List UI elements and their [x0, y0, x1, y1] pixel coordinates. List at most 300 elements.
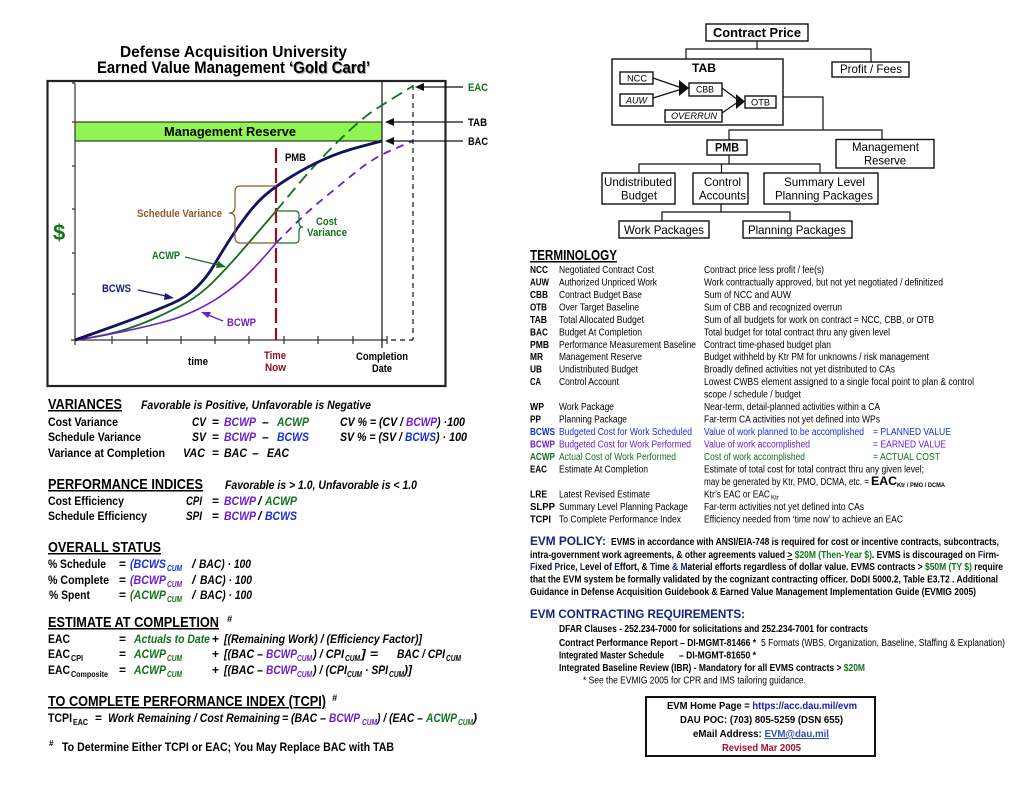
row: schedule variance: SV	[192, 430, 207, 444]
row: cost variance: –	[262, 415, 269, 429]
row: percent schedule: CUM	[167, 564, 182, 573]
row: EAC composite: )]	[402, 663, 413, 677]
term: EAC: Ktr / PMO / DCMA	[897, 482, 945, 489]
term: WP	[530, 402, 880, 413]
requirement note: * See the EVMIG 2005 for CPR and IMS tailoring guidance.	[583, 676, 806, 686]
footnote: To Determine Either TCPI or EAC; You May Replace BAC with TAB	[62, 740, 394, 754]
row: schedule variance: –	[262, 430, 269, 444]
heading: estimate at completion: ESTIMATE AT COMPLETION	[48, 614, 219, 631]
row: cost variance: Cost Variance	[48, 415, 118, 429]
term: LRE	[530, 490, 780, 502]
term: WP: WP	[530, 402, 544, 413]
box: NCC: NCC	[627, 74, 647, 84]
row: EAC: +	[212, 632, 219, 646]
row: TCPI formula: CUM	[458, 718, 473, 727]
term: NCC: NCC	[530, 265, 548, 276]
row: variance at completion: BAC	[224, 446, 247, 460]
row: TCPI formula: BCWP	[329, 711, 361, 725]
connectors	[639, 41, 882, 221]
term: CBB: CBB	[530, 290, 548, 301]
arrows into CBB	[653, 78, 689, 98]
requirement: integrated master schedule	[559, 650, 756, 662]
term: NCC: Contract price less profit / fee(s)	[704, 265, 824, 276]
row: schedule variance	[48, 430, 467, 444]
box: undistributed budget	[602, 173, 675, 204]
term: UB: UB	[530, 364, 542, 376]
box: summary level planning packages: Planning Packages	[775, 188, 873, 202]
schedule variance brace	[137, 186, 276, 243]
row: TCPI formula: TCPI	[48, 711, 72, 725]
row: EAC CPI: CUM	[167, 654, 182, 663]
row: TCPI formula: CUM	[362, 718, 377, 727]
row: EAC CPI: EAC	[48, 647, 70, 661]
box: planning packages: Planning Packages	[748, 223, 846, 237]
term: ACWP: = ACTUAL COST	[873, 452, 940, 463]
row: EAC CPI: CUM	[446, 654, 461, 663]
term: ACWP: Actual Cost of Work Performed	[559, 452, 676, 463]
row: cost efficiency	[48, 494, 298, 508]
EAC marker arrow	[415, 82, 488, 94]
box: PMB: PMB	[715, 140, 739, 154]
row: EAC composite: ) / (CPI	[311, 663, 348, 677]
term: AUW: Authorized Unpriced Work	[559, 278, 658, 288]
row: schedule variance: Schedule Variance	[48, 430, 141, 444]
row: TCPI formula: EAC	[73, 718, 88, 727]
box: control accounts: Accounts	[699, 188, 746, 202]
row: percent complete: /	[191, 573, 197, 587]
row: EAC composite: CUM	[297, 670, 312, 679]
term: TCPI: TCPI	[530, 514, 551, 526]
term: WP: Near-term, detail-planned activities within a CA	[704, 402, 880, 413]
row: schedule variance: BCWP	[224, 430, 257, 444]
row: TCPI formula: ) / (EAC –	[375, 711, 423, 725]
box: profit and fees: Profit / Fees	[840, 62, 902, 76]
ACWP label and arrow: ACWP	[152, 250, 180, 262]
term: UB: Broadly defined activities not yet distributed to CAs	[704, 364, 895, 376]
ACWP curve	[75, 86, 413, 340]
chart frame	[48, 81, 446, 386]
row: percent complete: % Complete	[48, 573, 109, 587]
row: EAC composite	[48, 663, 413, 679]
dollar axis label: $	[53, 220, 65, 245]
TAB marker arrow	[385, 117, 487, 129]
row: schedule variance: SV % = (SV /	[340, 430, 403, 444]
term: BCWS: = PLANNED VALUE	[873, 427, 951, 438]
panel: earned value chart	[48, 81, 488, 386]
box: overrun: OVERRUN	[671, 111, 717, 122]
term: BCWP: Budgeted Cost for Work Performed	[559, 440, 691, 450]
box: summary level planning packages	[764, 173, 878, 204]
x axis labels: Completion	[356, 351, 408, 363]
box: CBB	[689, 83, 722, 96]
row: EAC CPI: [(BAC –	[223, 647, 263, 661]
box: AUW: AUW	[625, 96, 648, 106]
heading: TCPI: TO COMPLETE PERFORMANCE INDEX (TCPI)	[48, 693, 326, 710]
row: cost efficiency: ACWP	[264, 494, 298, 508]
box: control accounts	[693, 173, 748, 204]
term: BCWP: Value of work accomplished	[704, 440, 810, 450]
heading: EVM policy: EVM POLICY:	[530, 536, 606, 548]
term: OTB: Over Target Baseline	[559, 302, 639, 314]
term: ACWP	[530, 452, 940, 463]
row: percent schedule: BAC) · 100	[199, 557, 251, 571]
row: cost efficiency: =	[212, 494, 219, 508]
box: TAB with sub-flow: TAB	[692, 61, 716, 75]
row: variance at completion: Variance at Completion	[48, 446, 165, 460]
TAB marker arrow: TAB	[468, 117, 487, 129]
x axis labels: Date	[372, 363, 392, 375]
box: contract price: Contract Price	[713, 25, 801, 40]
row: EAC composite: CUM	[389, 670, 404, 679]
box: PMB	[707, 140, 747, 155]
heading: contracting requirements: EVM CONTRACTING REQUIREMENTS:	[530, 609, 745, 621]
term: PMB: PMB	[530, 340, 549, 351]
row: EAC composite: ACWP	[133, 663, 167, 677]
term: TCPI: To Complete Performance Index	[559, 514, 681, 526]
box: summary level planning packages: Summary Level	[784, 175, 865, 189]
heading: estimate at completion: #	[227, 614, 232, 624]
term: WP: Work Package	[559, 402, 614, 413]
row: percent spent: CUM	[167, 595, 182, 604]
term: EAC: may be generated by Ktr, PMO, DCMA, etc. =	[704, 477, 869, 488]
panel: estimate at completion	[48, 614, 461, 679]
term: PMB: Contract time-phased budget plan	[704, 340, 831, 351]
callout: contact box: eMail Address: EVM@dau.mil	[693, 728, 829, 740]
requirement: contract performance report: Contract Performance Report – DI-MGMT-81466 *	[559, 638, 756, 649]
row: percent complete: CUM	[167, 580, 182, 589]
EAC marker arrow: EAC	[468, 82, 488, 94]
BCWP label and arrow	[201, 312, 256, 329]
policy paragraph: Fixed Price, Level of Effort, & Time & Material efforts regardless of dollar value. EVMS contracts > $50M (TY $) require	[530, 562, 1003, 573]
x axis labels	[188, 350, 408, 375]
term: CA: CA	[530, 377, 541, 388]
panel: EVM policy	[530, 536, 1003, 598]
row: EAC: EAC	[48, 632, 70, 646]
note: favorable positive: Favorable is Positive, Unfavorable is Negative	[141, 398, 371, 412]
term: CA: Lowest CWBS element assigned to a single focal point to plan & control	[704, 377, 974, 388]
box: AUW	[620, 94, 653, 106]
row: percent schedule: (BCWS	[130, 557, 166, 571]
term: NCC	[530, 265, 824, 276]
box: TAB with sub-flow	[612, 59, 783, 125]
BCWS label and arrow	[102, 283, 174, 300]
term: BCWS	[530, 427, 951, 438]
term: SLPP: Far-term activities not yet defined into CAs	[704, 502, 864, 513]
term: CA	[530, 377, 974, 400]
term: ACWP: ACWP	[530, 452, 555, 463]
term: LRE: LRE	[530, 490, 547, 500]
term: OTB: Sum of CBB and recognized overrun	[704, 302, 842, 314]
row: percent complete	[48, 573, 252, 589]
term: CBB: Contract Budget Base	[559, 290, 642, 301]
box: management reserve: Management	[852, 140, 920, 154]
x axis labels: time	[188, 356, 208, 368]
term: TAB: Total Allocated Budget	[559, 315, 644, 326]
row: schedule variance: BCWS	[277, 430, 309, 444]
row: percent complete: (BCWP	[130, 573, 167, 587]
row: TCPI formula	[48, 711, 477, 727]
row: EAC CPI: CUM	[345, 654, 360, 663]
row: schedule efficiency	[48, 509, 297, 523]
term: CA: scope / schedule / budget	[704, 390, 801, 400]
BCWP label and arrow: BCWP	[227, 317, 256, 329]
term: BAC: BAC	[530, 328, 548, 338]
term: MR: MR	[530, 352, 544, 363]
title: Defense Acquisition University	[120, 44, 347, 61]
x axis labels: Time	[264, 350, 286, 362]
term: TAB: Sum of all budgets for work on contract = NCC, CBB, or OTB	[704, 315, 934, 326]
row: schedule variance: BCWS	[405, 430, 436, 444]
row: schedule efficiency: =	[212, 509, 219, 523]
policy paragraph	[530, 537, 1003, 598]
row: variance at completion: =	[212, 446, 219, 460]
box: OTB	[745, 96, 776, 108]
schedule variance brace: Schedule Variance	[137, 208, 222, 220]
heading: TCPI: #	[332, 693, 337, 703]
row: EAC CPI: =	[119, 647, 126, 661]
box: work packages: Work Packages	[624, 223, 704, 237]
term: SLPP	[530, 502, 864, 513]
row: schedule efficiency: /	[257, 509, 263, 523]
row: EAC CPI: CPI	[71, 654, 83, 663]
term: CBB: Sum of NCC and AUW	[704, 290, 791, 301]
row: EAC CPI: +	[212, 647, 219, 661]
row: percent schedule: % Schedule	[48, 557, 106, 571]
title	[97, 44, 370, 77]
row: cost variance: CV	[192, 415, 207, 429]
term: TAB	[530, 315, 934, 326]
x axis labels: Now	[265, 362, 286, 374]
callout: contact box: EVM Home Page = https://acc.dau.mil/evm	[667, 700, 857, 712]
row: EAC composite: CUM	[347, 670, 362, 679]
row: TCPI formula: Work Remaining / Cost Remaining	[108, 711, 281, 725]
row: schedule efficiency: BCWS	[265, 509, 297, 523]
ACWP label and arrow	[152, 250, 226, 268]
row: TCPI formula: ACWP	[425, 711, 458, 725]
row: variance at completion: –	[252, 446, 259, 460]
panel: budget hierarchy diagram	[602, 24, 934, 238]
BAC marker arrow	[385, 136, 488, 148]
row: cost variance: ) ·100	[435, 415, 465, 429]
term: BCWP: BCWP	[530, 440, 555, 450]
row: EAC	[48, 632, 423, 646]
term: AUW	[530, 278, 943, 288]
term: MR	[530, 352, 929, 363]
row: percent complete: =	[119, 573, 126, 587]
term: MR: Budget withheld by Ktr PM for unknowns / risk management	[704, 352, 929, 363]
box: undistributed budget: Undistributed	[604, 175, 672, 189]
row: EAC CPI: CUM	[297, 654, 312, 663]
BCWS curve	[75, 141, 382, 340]
cost variance brace: Variance	[307, 227, 347, 239]
row: cost efficiency: /	[257, 494, 263, 508]
box: control accounts: Control	[704, 175, 741, 189]
panel: terminology	[530, 247, 974, 526]
row: EAC CPI: BCWP	[266, 647, 298, 661]
row: cost variance: CV % = (CV /	[340, 415, 404, 429]
term: TAB: TAB	[530, 315, 547, 326]
row: percent spent: BAC) · 100	[200, 588, 252, 602]
term: OTB: OTB	[530, 302, 547, 314]
term: ACWP: Cost of work accomplished	[704, 452, 805, 463]
term: SLPP: SLPP	[530, 502, 555, 513]
callout: contact box: DAU POC: (703) 805-5259 (DSN 655)	[680, 714, 843, 726]
row: cost efficiency: CPI	[186, 494, 203, 508]
cost variance brace: Cost	[316, 216, 337, 228]
term: BAC: Budget At Completion	[559, 328, 642, 338]
row: percent spent: % Spent	[49, 588, 90, 602]
panel: to complete performance index	[48, 693, 477, 754]
row: EAC composite: EAC	[48, 663, 70, 677]
term: BCWS: Budgeted Cost for Work Scheduled	[559, 427, 692, 438]
row: cost variance: =	[212, 415, 219, 429]
row: EAC CPI: ) / CPI	[311, 647, 345, 661]
box: NCC	[620, 72, 653, 84]
panel: performance indices	[48, 476, 417, 523]
row: schedule variance: ) · 100	[434, 430, 467, 444]
row: schedule efficiency: SPI	[186, 509, 203, 523]
row: percent spent	[49, 588, 252, 604]
term: PP	[530, 414, 880, 426]
term: EAC: EAC	[530, 464, 547, 476]
BAC marker arrow: BAC	[468, 136, 488, 148]
row: EAC CPI	[48, 647, 461, 663]
requirement: contract performance report	[559, 638, 1005, 649]
row: EAC composite: Composite	[71, 670, 108, 679]
row: EAC: Actuals to Date	[133, 632, 210, 646]
panel: variances	[48, 396, 467, 460]
row: cost variance: ACWP	[276, 415, 310, 429]
row: cost efficiency: BCWP	[224, 494, 257, 508]
row: EAC composite: CUM	[167, 670, 182, 679]
row: EAC CPI: ] =	[359, 647, 378, 661]
box: CBB: CBB	[696, 84, 714, 96]
note: favorable above one: Favorable is > 1.0, Unfavorable is < 1.0	[225, 478, 417, 492]
requirement: DFAR clauses: DFAR Clauses - 252.234-7000 for solicitations and 252.234-7001 for contracts	[559, 624, 868, 635]
term: CA: Control Account	[559, 377, 619, 388]
term: MR: Management Reserve	[559, 352, 642, 363]
term: LRE: Latest Revised Estimate	[559, 490, 650, 500]
row: EAC composite: · SPI	[365, 663, 389, 677]
term: LRE: Ktr’s EAC or EAC	[704, 490, 770, 500]
term: TCPI: Efficiency needed from ‘time now’ to achieve an EAC	[704, 514, 903, 526]
footnote: #	[49, 739, 54, 748]
row: EAC composite: =	[119, 663, 126, 677]
term: PMB: Performance Measurement Baseline	[559, 340, 696, 351]
heading: variances: VARIANCES	[48, 396, 122, 413]
row: cost variance: BCWP	[224, 415, 257, 429]
arrows into OTB	[722, 88, 745, 113]
term: EAC: Estimate At Completion	[559, 464, 648, 476]
cost variance brace	[276, 211, 347, 243]
row: TCPI formula: =	[95, 711, 102, 725]
row: percent schedule	[48, 557, 251, 573]
row: EAC: =	[119, 632, 126, 646]
row: percent spent: =	[119, 588, 126, 602]
row: EAC composite: [(BAC –	[223, 663, 263, 677]
term: PMB	[530, 340, 831, 351]
term: EAC: EAC	[871, 474, 897, 488]
term: BCWP: = EARNED VALUE	[873, 440, 946, 450]
callout: contact box	[646, 697, 875, 756]
management reserve band: Management Reserve	[164, 124, 296, 139]
row: EAC composite: BCWP	[266, 663, 298, 677]
term: AUW: Work contractually approved, but not yet negotiated / definitized	[704, 278, 943, 288]
term: UB	[530, 364, 895, 376]
box: management reserve	[836, 140, 934, 168]
row: percent spent: /	[191, 588, 197, 602]
box: management reserve: Reserve	[864, 154, 906, 168]
requirement: integrated baseline review: Integrated Baseline Review (IBR) - Mandatory for all EVMS contracts > $20M	[559, 663, 865, 674]
row: percent schedule: =	[119, 557, 126, 571]
management reserve band	[75, 122, 382, 141]
heading: overall status: OVERALL STATUS	[48, 539, 161, 556]
row: variance at completion	[48, 446, 289, 460]
row: EAC: [(Remaining Work) / (Efficiency Factor)]	[223, 632, 423, 646]
row: cost variance: BCWP	[406, 415, 438, 429]
row: variance at completion: VAC	[183, 446, 205, 460]
requirement: integrated master schedule: Integrated Master Schedule	[559, 650, 664, 662]
requirement: integrated master schedule: – DI-MGMT-81650 *	[679, 650, 756, 662]
term: EAC	[530, 464, 945, 489]
policy paragraph: intra-government work agreements, & other agreements valued > $20M (Then-Year $). EVMS is discouraged on Firm-	[530, 550, 999, 561]
term: PP: PP	[530, 414, 541, 426]
row: EAC CPI: BAC / CPI	[397, 647, 446, 661]
term: OTB	[530, 302, 842, 314]
row: schedule efficiency: BCWP	[224, 509, 257, 523]
term: UB: Undistributed Budget	[559, 364, 638, 376]
term: PP: Far-term CA activities not yet defined into WPs	[704, 414, 880, 426]
BCWS label and arrow: BCWS	[102, 283, 131, 295]
row: TCPI formula: = (BAC –	[282, 711, 326, 725]
title: ‘Gold Card’	[289, 59, 370, 77]
chart axes and ticks	[71, 81, 413, 348]
row: TCPI formula: )	[471, 711, 477, 725]
row: percent schedule: /	[191, 557, 197, 571]
term: TCPI	[530, 514, 903, 526]
box: OTB: OTB	[751, 98, 770, 108]
row: schedule variance: =	[212, 430, 219, 444]
title: Earned Value Management	[97, 59, 285, 77]
row: percent complete: BAC) · 100	[200, 573, 252, 587]
term: BAC	[530, 328, 890, 338]
term: NCC: Negotiated Contract Cost	[559, 265, 654, 276]
term: AUW: AUW	[530, 278, 549, 288]
term: BCWS: BCWS	[530, 427, 555, 438]
term: BCWS: Value of work planned to be accomplished	[704, 427, 864, 438]
term: BAC: Total budget for total contract thru any given level	[704, 328, 890, 338]
heading: performance indices: PERFORMANCE INDICES	[48, 476, 203, 493]
row: EAC composite: +	[212, 663, 219, 677]
time now line	[275, 148, 277, 340]
box: undistributed budget: Budget	[621, 188, 658, 202]
row: schedule efficiency: Schedule Efficiency	[48, 509, 147, 523]
row: variance at completion: EAC	[267, 446, 289, 460]
term: BCWP	[530, 440, 946, 450]
callout: contact box: Revised Mar 2005	[722, 742, 801, 754]
panel: overall status	[48, 539, 252, 604]
term: PP: Planning Package	[559, 414, 627, 426]
panel: EVM contracting requirements	[530, 609, 1005, 686]
heading: terminology: TERMINOLOGY	[530, 247, 617, 264]
row: percent spent: (ACWP	[130, 588, 167, 602]
term: CBB	[530, 290, 791, 301]
row: cost variance	[48, 415, 465, 429]
PMB label: PMB	[285, 152, 306, 164]
row: EAC CPI: ACWP	[133, 647, 167, 661]
term: EAC: Estimate of total cost for total contract thru any given level;	[704, 464, 924, 476]
term: SLPP: Summary Level Planning Package	[559, 502, 688, 513]
